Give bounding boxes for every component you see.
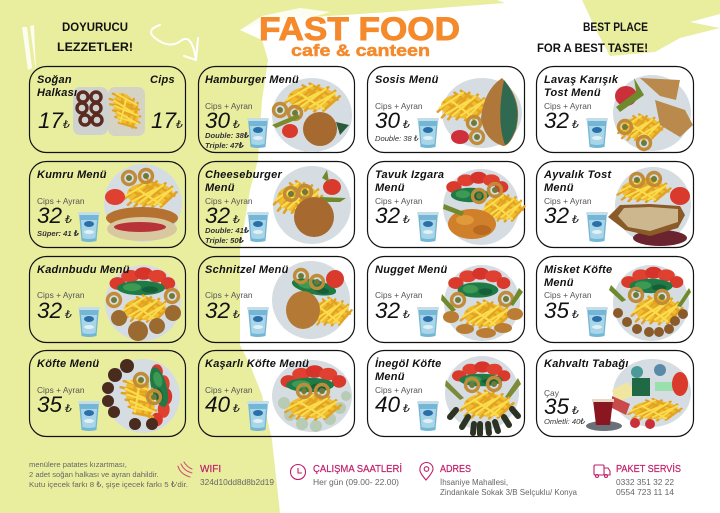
heading: left slogan — [57, 20, 133, 54]
panel: Tavuk Izgara Menü: 32 — [375, 203, 401, 228]
panel: Kumru Menü: 32 — [37, 203, 63, 228]
icon: delivery truck — [594, 465, 610, 478]
icon: wifi — [178, 462, 192, 477]
panel: Kahvaltı Tabağı — [536, 350, 694, 436]
panel: Nugget Menü: ₺ — [402, 309, 410, 321]
panel: Kumru Menü: Cips + Ayran — [37, 196, 85, 206]
panel: Schnitzel Menü — [198, 256, 354, 342]
panel: Schnitzel Menü: Schnitzel Menü — [205, 264, 289, 276]
panel: Schnitzel Menü: Cips + Ayran — [205, 290, 253, 300]
panel: Kadınbudu Menü — [30, 256, 186, 342]
panel: Kumru Menü: Kumru Menü — [37, 169, 107, 181]
heading: right slogan: BEST PLACE — [583, 20, 648, 34]
panel: Hamburger Menü — [198, 66, 354, 152]
panel: Hamburger Menü: Hamburger Menü — [205, 74, 299, 86]
panel: Lavaş Karışık Tost Menü: Tost Menü — [544, 87, 601, 99]
info: address: ADRES — [440, 464, 471, 475]
panel: Kadınbudu Menü: Cips + Ayran — [37, 290, 85, 300]
panel: Kaşarlı Köfte Menü — [198, 350, 354, 436]
panel: Soğan Halkası and Cips: Cips — [150, 74, 175, 86]
panel: Kumru Menü: ₺ — [64, 214, 72, 226]
panel: Kaşarlı Köfte Menü: 40 — [205, 392, 231, 417]
panel: Misket Köfte Menü: ₺ — [571, 309, 579, 321]
panel: Cheeseburger Menü: ₺ — [232, 214, 240, 226]
panel: Sosis Menü: Cips + Ayran — [375, 101, 423, 111]
panel: İnegöl Köfte Menü: Cips + Ayran — [375, 385, 423, 395]
panel: Soğan Halkası and Cips: Halkası — [37, 87, 77, 99]
panel: Schnitzel Menü: ₺ — [232, 309, 240, 321]
info: address — [440, 464, 578, 497]
info: delivery service: 0332 351 32 22 — [616, 478, 675, 487]
note: included items: 2 adet soğan halkası ve ayran dahildir. — [29, 470, 159, 479]
panel: İnegöl Köfte Menü: 40 — [375, 392, 401, 417]
panel: Tavuk Izgara Menü — [368, 162, 525, 248]
panel: Kahvaltı Tabağı: ₺ — [571, 405, 579, 417]
panel: Cheeseburger Menü: Cips + Ayran — [205, 196, 253, 206]
panel: Kadınbudu Menü: ₺ — [64, 309, 72, 321]
panel: Soğan Halkası and Cips: ₺ — [175, 119, 183, 131]
note: included items: Kutu içecek farkı 8 ₺, şişe içecek farkı 5 ₺'dir. — [29, 480, 188, 489]
heading: right slogan: FOR A BEST TASTE! — [537, 41, 648, 55]
heading: left slogan: DOYURUCU — [62, 20, 128, 34]
panel: Kumru Menü: Süper: 41 ₺ — [37, 229, 80, 238]
panel: Tavuk Izgara Menü: Tavuk Izgara — [375, 169, 444, 181]
panel: Ayvalık Tost Menü: ₺ — [571, 214, 579, 226]
panel: Lavaş Karışık Tost Menü: Cips + Ayran — [544, 101, 592, 111]
panel: Köfte Menü: ₺ — [64, 403, 72, 415]
panel: Lavaş Karışık Tost Menü — [536, 66, 694, 152]
panel: Kaşarlı Köfte Menü: Cips + Ayran — [205, 385, 253, 395]
panel: Soğan Halkası and Cips: 17 — [151, 108, 178, 133]
info: working hours: Her gün (09.00- 22.00) — [313, 478, 399, 487]
logo title: cafe & canteen — [291, 41, 430, 60]
info: address: Zindankale Sokak 3/B Selçuklu/ Konya — [440, 488, 578, 497]
panel: Kaşarlı Köfte Menü: Kaşarlı Köfte Menü — [205, 358, 309, 370]
icon: location pin — [420, 462, 433, 480]
heading: left slogan: LEZZETLER! — [57, 40, 133, 54]
panel: Kahvaltı Tabağı: Çay — [544, 388, 560, 398]
panel: Hamburger Menü: ₺ — [232, 119, 240, 131]
panel: Soğan Halkası and Cips: 17 — [38, 108, 65, 133]
panel: Sosis Menü: Double: 38 ₺ — [375, 134, 419, 143]
panel: Köfte Menü: Cips + Ayran — [37, 385, 85, 395]
info: delivery service: 0554 723 11 14 — [616, 488, 675, 497]
note: included items: menülere patates kızartması, — [29, 460, 127, 469]
panel: Ayvalık Tost Menü: Menü — [544, 182, 574, 194]
info: wifi: WIFI — [200, 464, 221, 475]
panel: Misket Köfte Menü: 35 — [544, 298, 570, 323]
panel: Kahvaltı Tabağı: 35 — [544, 394, 570, 419]
panel: Köfte Menü: 35 — [37, 392, 63, 417]
panel: Kahvaltı Tabağı: Kahvaltı Tabağı — [544, 358, 629, 370]
panel: Hamburger Menü: Cips + Ayran — [205, 101, 253, 111]
panel: Kaşarlı Köfte Menü: ₺ — [232, 403, 240, 415]
info: wifi: 324d10dd8d8b2d19 — [200, 478, 275, 487]
panel: Nugget Menü: Cips + Ayran — [375, 290, 423, 300]
panel: Cheeseburger Menü: Triple: 50₺ — [205, 236, 245, 245]
panel: Kahvaltı Tabağı: Omletli: 40₺ — [544, 417, 585, 426]
panel: Soğan Halkası and Cips: Soğan — [37, 74, 72, 86]
panel: Ayvalık Tost Menü: Ayvalık Tost — [543, 169, 612, 181]
panel: Soğan Halkası and Cips: ₺ — [62, 119, 70, 131]
panel: Misket Köfte Menü: Menü — [544, 277, 574, 289]
panel: Misket Köfte Menü: Misket Köfte — [544, 264, 612, 276]
panel: Köfte Menü: Köfte Menü — [37, 358, 99, 370]
panel: İnegöl Köfte Menü: Menü — [375, 371, 405, 383]
info: delivery service — [616, 462, 681, 497]
panel: Cheeseburger Menü: Double: 41₺ — [205, 226, 250, 235]
info: working hours — [313, 462, 402, 487]
panel: Cheeseburger Menü: Menü — [205, 182, 235, 194]
panel: Lavaş Karışık Tost Menü: ₺ — [571, 119, 579, 131]
panel: Misket Köfte Menü — [536, 256, 694, 342]
panel: Tavuk Izgara Menü: Cips + Ayran — [375, 196, 423, 206]
panel: İnegöl Köfte Menü: ₺ — [402, 403, 410, 415]
panel: İnegöl Köfte Menü: İnegöl Köfte — [375, 357, 442, 370]
panel: Soğan Halkası and Cips — [30, 66, 186, 152]
panel: Schnitzel Menü: 32 — [205, 298, 231, 323]
info: wifi — [200, 464, 275, 487]
info: address: İhsaniye Mahallesi, — [440, 478, 508, 487]
arrow: white curved arrow — [151, 25, 198, 60]
panel: Cheeseburger Menü — [198, 162, 354, 248]
panel: Cheeseburger Menü: 32 — [205, 203, 231, 228]
heading: right slogan — [537, 20, 648, 55]
panel: Ayvalık Tost Menü — [536, 162, 694, 248]
panel: Sosis Menü: ₺ — [402, 119, 410, 131]
panel: Lavaş Karışık Tost Menü: Lavaş Karışık — [544, 74, 619, 86]
info: working hours: ÇALIŞMA SAATLERİ — [313, 462, 402, 475]
panel: Ayvalık Tost Menü: 32 — [544, 203, 570, 228]
icon: clock — [290, 464, 306, 480]
info: delivery service: PAKET SERVİS — [616, 462, 681, 475]
panel: Nugget Menü: Nugget Menü — [375, 264, 447, 276]
panel: İnegöl Köfte Menü — [368, 350, 524, 436]
panel: Köfte Menü — [30, 350, 186, 436]
panel: Cheeseburger Menü: Cheeseburger — [205, 169, 282, 181]
panel: Ayvalık Tost Menü: Cips + Ayran — [544, 196, 592, 206]
panel: Sosis Menü — [368, 66, 524, 152]
panel: Nugget Menü: 32 — [375, 298, 401, 323]
panel: Kadınbudu Menü: Kadınbudu Menü — [37, 264, 130, 276]
panel: Hamburger Menü: Double: 38₺ — [205, 131, 250, 140]
logo title: FAST FOOD — [259, 11, 460, 47]
panel: Tavuk Izgara Menü: ₺ — [402, 214, 410, 226]
panel: Hamburger Menü: 30 — [205, 108, 231, 133]
panel: Kadınbudu Menü: 32 — [37, 298, 63, 323]
panel: Kumru Menü — [30, 162, 186, 248]
panel: Sosis Menü: 30 — [375, 108, 401, 133]
logo title — [259, 11, 460, 60]
note: included items — [29, 460, 188, 489]
panel: Lavaş Karışık Tost Menü: 32 — [544, 108, 570, 133]
panel: Tavuk Izgara Menü: Menü — [375, 182, 405, 194]
panel: Nugget Menü — [368, 256, 524, 342]
panel: Sosis Menü: Sosis Menü — [375, 74, 439, 86]
panel: Misket Köfte Menü: Cips + Ayran — [544, 290, 592, 300]
panel: Hamburger Menü: Triple: 47₺ — [205, 141, 245, 150]
